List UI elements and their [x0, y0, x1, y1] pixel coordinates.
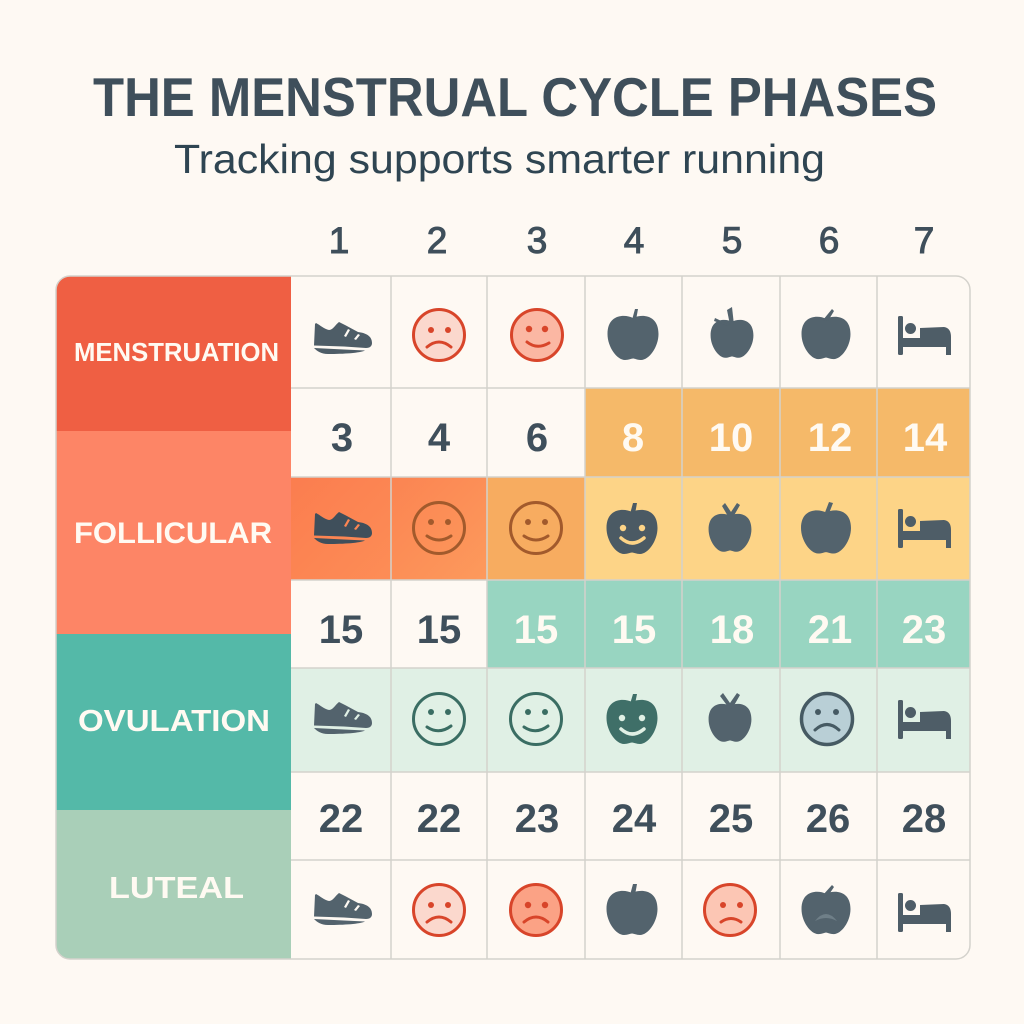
icon: apple: [606, 884, 658, 935]
row 2 numbers: 14: [903, 416, 948, 460]
icon: shoe: [314, 893, 372, 925]
row 2 numbers: 12: [808, 416, 852, 460]
row 6 numbers: 23: [515, 797, 559, 841]
day number header: 2: [427, 220, 447, 261]
icon: happy face: [510, 502, 562, 554]
row 2 numbers: 10: [709, 416, 753, 460]
icon: happy face: [510, 694, 562, 744]
row 7 icons: luteal: [314, 884, 951, 936]
phase label: menstruation: MENSTRUATION: [74, 337, 279, 367]
row 6 numbers: 24: [612, 797, 657, 841]
icon: sad apple: [802, 885, 850, 934]
row 6 numbers: 25: [709, 797, 753, 841]
icon: apple with leaf: [709, 693, 751, 742]
phase label: menstruation: [56, 276, 291, 431]
icon: happy face: [414, 502, 464, 554]
phase label: luteal: LUTEAL: [109, 870, 244, 905]
icon: bed: [898, 316, 951, 355]
row 6 numbers: [319, 797, 946, 841]
phase label: follicular: [56, 431, 291, 634]
subtitle: Tracking supports smarter running: [174, 136, 825, 182]
coloured cell fills: [291, 388, 970, 772]
table border: [56, 276, 970, 959]
day number header: 1: [329, 220, 349, 261]
phase label: ovulation: [56, 634, 291, 810]
icon: sad face: [414, 884, 464, 936]
table panel: [56, 276, 970, 959]
icon: apple with leaf: [711, 307, 753, 358]
icon: shoe: [314, 512, 372, 544]
icon: bed: [898, 893, 951, 932]
row 4 numbers: [319, 608, 946, 652]
icon: sad face: [510, 884, 562, 936]
row 6 numbers: 28: [902, 797, 946, 841]
row 4 numbers: 18: [710, 608, 754, 652]
icon: shoe: [314, 702, 372, 734]
icon: bed: [898, 700, 951, 739]
row 3 icons: follicular: [314, 502, 951, 554]
icon: apple: [802, 309, 850, 359]
row 2 numbers: 8: [622, 416, 644, 460]
row 5 icons: ovulation: [314, 693, 951, 744]
day number header: 3: [527, 220, 547, 261]
icon: apple: [608, 309, 658, 360]
icon: happy face: [512, 310, 562, 360]
row 4 numbers: 21: [808, 608, 852, 652]
row 4 numbers: 15: [417, 608, 461, 652]
row 4 numbers: 15: [319, 608, 363, 652]
day number header: 6: [819, 220, 839, 261]
icon: smiling apple: [606, 503, 658, 554]
grid lines: [291, 276, 970, 959]
title: THE MENSTRUAL CYCLE PHASES: [93, 66, 937, 128]
icon: sad face: [704, 884, 756, 936]
icon: happy face: [414, 694, 464, 744]
icon: shoe: [314, 322, 372, 354]
day number header: [329, 220, 934, 261]
phase label: follicular: FOLLICULAR: [74, 517, 272, 550]
row 4 numbers: 23: [902, 608, 946, 652]
day number header: 4: [624, 220, 644, 261]
row 6 numbers: 22: [319, 797, 363, 841]
row 4 numbers: 15: [612, 608, 656, 652]
icon: bed: [898, 509, 951, 548]
row 6 numbers: 26: [806, 797, 850, 841]
row 2 numbers: 4: [428, 416, 451, 460]
row 2 numbers: [331, 416, 948, 460]
row 1 icons: menstruation: [314, 307, 951, 360]
row 2 numbers: 3: [331, 416, 353, 460]
icon: grey sad face: [802, 694, 852, 744]
row 6 numbers: 22: [417, 797, 461, 841]
row 2 numbers: 6: [526, 416, 548, 460]
day number header: 7: [914, 220, 934, 261]
icon: smiling apple: [606, 694, 658, 744]
icon: sad face: [414, 310, 464, 360]
day number header: 5: [722, 220, 742, 261]
phase label: ovulation: OVULATION: [78, 703, 270, 738]
icon: apple: [801, 502, 851, 554]
icon: apple with leaf: [709, 503, 751, 552]
row 4 numbers: 15: [514, 608, 558, 652]
phase label: luteal: [56, 810, 291, 959]
